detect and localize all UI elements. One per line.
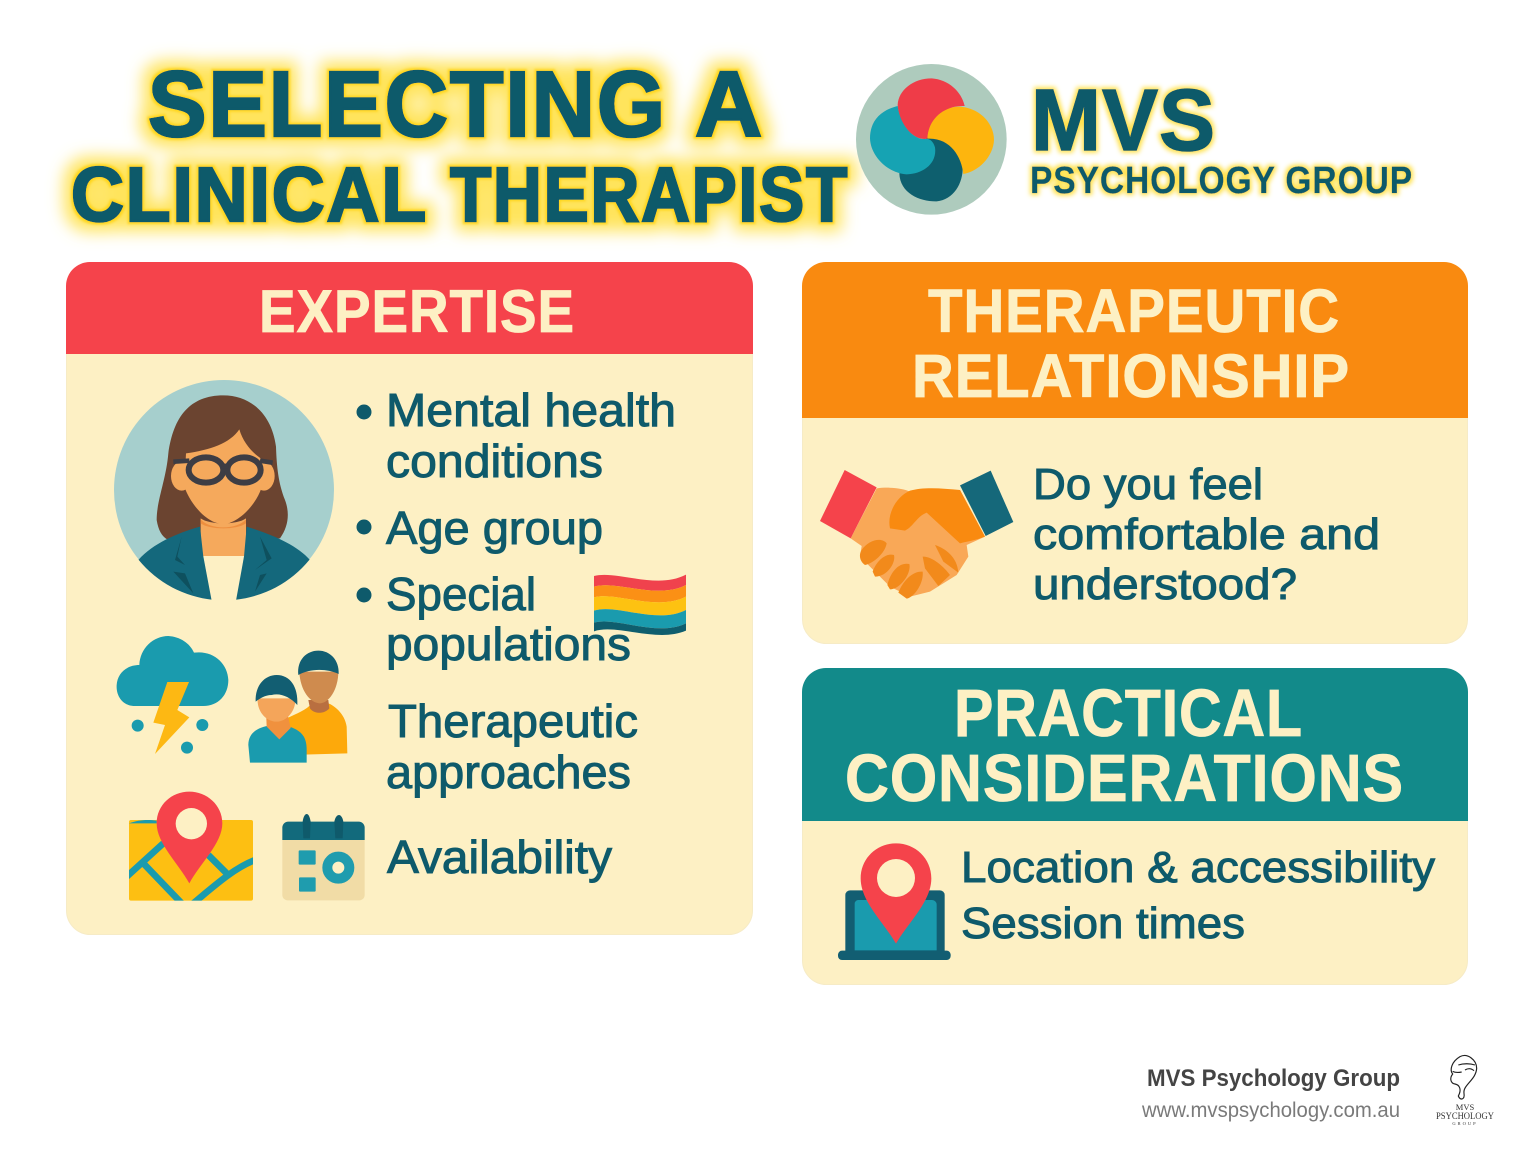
relationship header: THERAPEUTIC [928,277,1340,345]
expertise list [357,384,676,883]
expertise list: Mental health [386,384,676,436]
expertise list: Availability [387,831,612,883]
footer credit [1141,1065,1400,1122]
title: CLINICAL [71,152,428,238]
expertise header: EXPERTISE [259,278,575,345]
icon: pride flag [594,575,686,635]
practical list [961,843,1435,948]
footer logo: PSYCHOLOGY [1436,1111,1494,1121]
practical list: Session times [961,899,1245,948]
expertise list: Age group [386,502,603,554]
relationship question: comfortable and [1033,510,1380,559]
relationship header: RELATIONSHIP [912,342,1350,410]
relationship header [802,262,1468,418]
icon: therapist portrait [114,380,334,603]
expertise list: Special [386,568,536,620]
title: THERAPIST [450,152,849,238]
practical list: Location & accessibility [961,843,1435,892]
icon: laptop with pin [838,843,951,960]
icon: two people [248,651,347,763]
title: A [695,52,762,156]
panel: practical considerations [802,668,1468,984]
footer logo: GROUP [1452,1121,1478,1126]
panel: expertise [66,262,753,934]
logo mark [856,64,1007,215]
practical header [802,668,1468,821]
title [71,52,849,238]
expertise list: conditions [386,435,603,487]
practical header: PRACTICAL [954,676,1303,751]
icon: map with pin [127,792,255,903]
expertise list: populations [386,618,631,670]
icon: storm cloud [117,636,228,754]
relationship question: understood? [1033,560,1297,609]
footer logo: MVS [1456,1102,1474,1112]
brand name: PSYCHOLOGY GROUP [1030,160,1413,202]
brand name [1030,72,1413,202]
relationship question: Do you feel [1033,460,1263,509]
expertise list: Therapeutic [388,695,638,747]
relationship question [1033,460,1380,609]
icon: calendar [282,814,365,900]
icon: handshake [820,470,1013,599]
expertise list: approaches [386,746,631,798]
title: SELECTING [148,52,667,156]
panel: therapeutic relationship [802,262,1468,644]
brand name: MVS [1031,72,1216,169]
expertise header [66,262,753,354]
practical header: CONSIDERATIONS [845,741,1404,816]
footer credit: www.mvspsychology.com.au [1141,1099,1400,1122]
footer logo [1436,1056,1494,1126]
footer credit: MVS Psychology Group [1147,1065,1400,1092]
